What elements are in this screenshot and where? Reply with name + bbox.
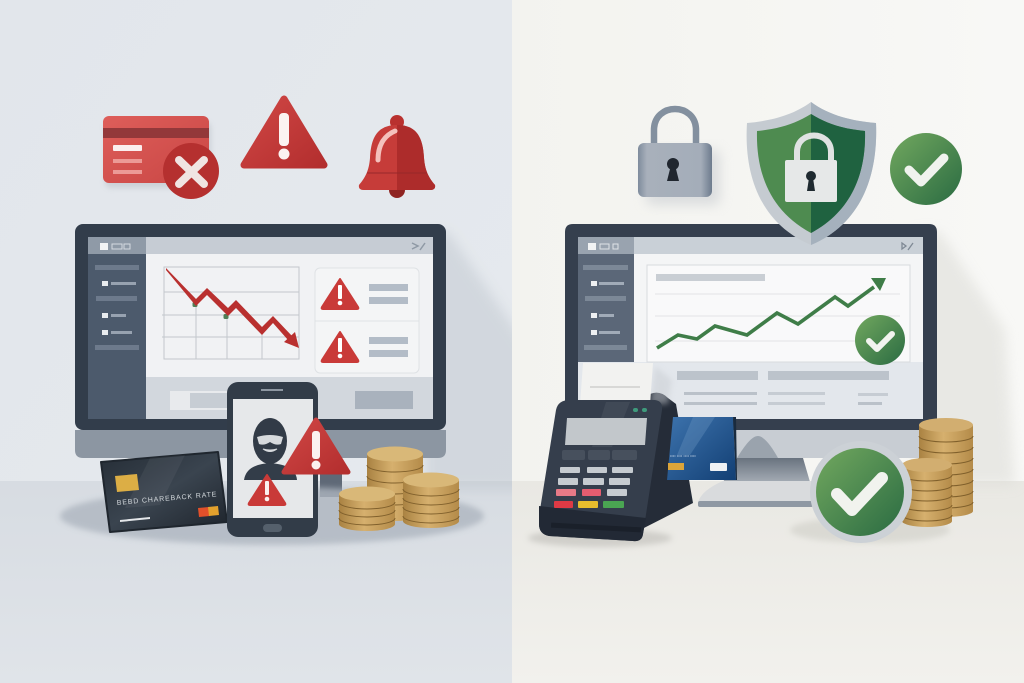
icon: check badge on chart (855, 315, 905, 365)
panel: risk background (0, 0, 512, 683)
icon: green security shield (747, 102, 876, 245)
icon: grey padlock (638, 109, 720, 205)
ground shadow: risk group (60, 487, 484, 545)
blue credit card: •••• •••• •••• •••• (670, 453, 696, 458)
credit card with chargeback rate: BEBD CHAREBACK RATE (117, 491, 218, 507)
icon: alarm bell (359, 115, 435, 198)
monitor shadow: secure side (915, 232, 1015, 485)
gold coin stacks: risk group (339, 446, 459, 531)
chart: falling rate (162, 267, 299, 359)
gold coin stacks: secure group (902, 418, 973, 527)
panel: secure background (512, 0, 1024, 683)
icon: green check circle (890, 133, 962, 205)
top bar (146, 237, 433, 254)
payment terminal (539, 363, 672, 541)
top bar (634, 237, 923, 254)
icon: small warning triangle (249, 475, 285, 505)
ground shadow: secure group (528, 517, 950, 547)
monitor: secure dashboard (565, 224, 937, 507)
phone with fraudster (227, 382, 318, 537)
monitor shadow: risk side (424, 234, 512, 488)
credit card with chargeback rate (101, 452, 227, 532)
receipt paper (580, 363, 672, 405)
icon: declined credit card (103, 116, 219, 199)
icon: masked fraudster (244, 418, 297, 480)
alert panel (315, 268, 419, 373)
icon: warning triangle (244, 99, 324, 165)
sidebar (88, 237, 146, 419)
lower table (578, 362, 923, 419)
terminal stand wedge (640, 393, 693, 530)
blue credit card (667, 417, 737, 480)
sidebar (578, 237, 634, 363)
chart: rising rate (647, 265, 910, 362)
monitor: risk dashboard (75, 224, 446, 497)
icon: large check badge (810, 441, 912, 543)
bottom strip (146, 377, 433, 419)
icon: large warning triangle (284, 420, 348, 472)
